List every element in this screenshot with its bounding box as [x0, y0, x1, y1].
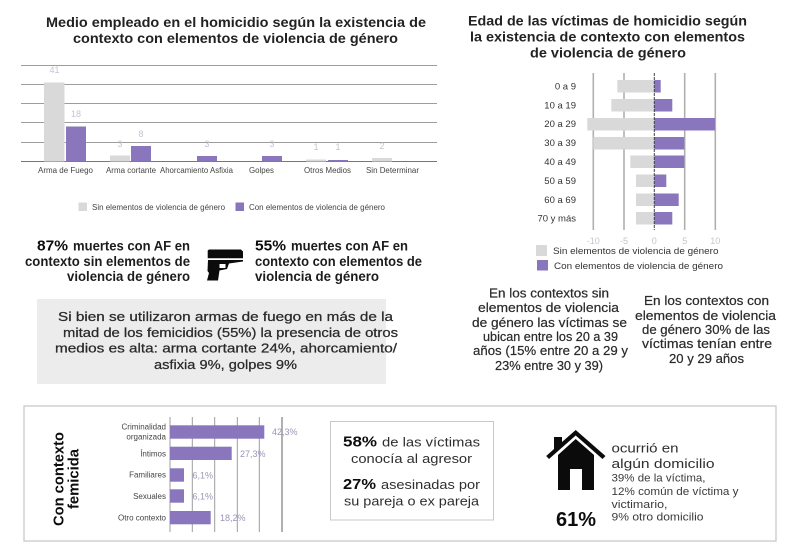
bar chart: contexto femicida: Criminalidad: [122, 422, 166, 432]
bar chart: edad de las víctimas: [537, 73, 720, 246]
text: contextos con elementos: víctimas tenían entre: [642, 337, 772, 351]
heading: con contexto femicida: Con contexto: [50, 432, 67, 526]
bar chart: edad de las víctimas: 10 a 19: [544, 100, 576, 112]
bar chart: contexto femicida: 18,2%: [220, 513, 246, 523]
bar chart: medio empleado: 18: [71, 109, 81, 119]
callout: armas de fuego: asfixia 9%, golpes 9%: [154, 357, 297, 372]
bar chart: edad de las víctimas: 70 y más: [537, 214, 576, 224]
callout: conocía al agresor: 27%: [343, 476, 376, 493]
bar chart: contexto femicida: Familiares: [129, 470, 166, 480]
text: contextos sin elementos: años (15% entre 20 a 29 y: [473, 344, 629, 358]
bar chart: contexto femicida: Sexuales: [133, 492, 166, 501]
title: medio empleado: [46, 14, 426, 46]
stat: 55%: contexto con elementos de: [255, 254, 422, 269]
text: contextos con elementos: En los contextos con: [644, 294, 769, 308]
callout: armas de fuego: medios es alta: arma cortante 24%, ahorcamiento/: [55, 340, 397, 356]
bar chart: edad de las víctimas: 50 a 59: [544, 176, 576, 187]
stat: 61% en domicilio: 9% otro domicilio: [612, 512, 704, 524]
stat: 61% en domicilio: ocurrió en: [612, 441, 678, 456]
stat: 61% en domicilio: victimario,: [612, 499, 668, 511]
legend: medio empleado: Sin elementos de violencia de género: [92, 203, 226, 212]
bar chart: medio empleado: Otros Medios: [304, 166, 351, 175]
stat: 55%: [255, 238, 422, 284]
title: medio empleado: Medio empleado en el homicidio según la existencia de: [46, 14, 426, 30]
bar chart: contexto femicida: 6,1%: [192, 492, 213, 502]
bar chart: medio empleado: 3: [269, 139, 275, 149]
title: edad de las víctimas: Edad de las víctimas de homicidio según: [468, 13, 747, 29]
bar chart: contexto femicida: organizada: [126, 432, 167, 442]
stat: 55%: 55%: [255, 238, 286, 255]
callout: armas de fuego: Si bien se utilizaron armas de fuego en más de la: [58, 309, 394, 324]
bar chart: medio empleado: 3: [117, 139, 123, 149]
bar chart: medio empleado: Golpes: [249, 166, 274, 175]
icon: house: [546, 430, 606, 490]
callout: conocía al agresor: conocía al agresor: [351, 451, 473, 466]
bar chart: edad de las víctimas: 20 a 29: [544, 119, 576, 130]
legend: medio empleado: Con elementos de violencia de género: [249, 203, 386, 212]
callout: conocía al agresor: 58%: [343, 434, 377, 451]
bar chart: medio empleado: 41: [49, 65, 60, 75]
bar chart: medio empleado: Arma de Fuego: [38, 166, 94, 175]
bar chart: contexto femicida: Íntimos: [140, 450, 166, 458]
bar chart: edad de las víctimas: 5: [682, 236, 687, 246]
bar chart: edad de las víctimas: -10: [587, 236, 600, 246]
stat: 87%: muertes con AF en: [73, 239, 190, 254]
text: contextos sin elementos: En los contextos sin: [489, 286, 609, 300]
stat: 87%: contexto sin elementos de: [25, 254, 190, 269]
callout: conocía al agresor: asesinadas por: [381, 477, 481, 492]
bar chart: medio empleado: 1: [313, 142, 319, 152]
text: contextos con elementos: de género 30% de las: [642, 323, 770, 337]
bar chart: edad de las víctimas: 60 a 69: [544, 195, 576, 206]
text: contextos con elementos: elementos de violencia: [635, 309, 776, 323]
callout: armas de fuego: mitad de los femicidios (55%) la presencia de otros: [63, 325, 399, 340]
bar chart: contexto femicida: 27,3%: [240, 449, 266, 459]
bar chart: edad de las víctimas: 0: [652, 236, 657, 246]
text: contextos con elementos: 20 y 29 años: [669, 352, 744, 366]
title: edad de las víctimas: de violencia de género: [530, 45, 686, 61]
bar chart: edad de las víctimas: 30 a 39: [544, 138, 576, 149]
bar chart: medio empleado: 1: [335, 142, 341, 152]
heading: con contexto femicida: [50, 432, 82, 526]
text: contextos sin elementos: ubican entre los 20 a 39: [483, 330, 618, 344]
stat: 61% en domicilio: 61%: [556, 509, 596, 531]
bar chart: medio empleado: Ahorcamiento Asfixia: [160, 166, 234, 175]
stat: 61% en domicilio: algún domicilio: [612, 456, 714, 471]
bar chart: edad de las víctimas: 0 a 9: [555, 82, 576, 92]
stat: 61% en domicilio: 12% común de víctima y: [612, 486, 739, 498]
heading: con contexto femicida: femicida: [65, 448, 82, 509]
bar chart: medio empleado: 3: [204, 139, 210, 149]
stat: 55%: muertes con AF en: [291, 239, 408, 254]
bar chart: medio empleado: 2: [379, 141, 385, 151]
title: edad de las víctimas: [468, 13, 747, 61]
panel: con contexto femicida: [24, 406, 776, 541]
callout: conocía al agresor: de las víctimas: [382, 435, 481, 450]
title: edad de las víctimas: la existencia de contexto con elementos: [470, 29, 745, 45]
text: contextos sin elementos: [472, 286, 629, 373]
callout: conocía al agresor: su pareja o ex pareja: [344, 494, 480, 509]
bar chart: medio empleado: Arma cortante: [106, 166, 157, 175]
text: contextos sin elementos: 23% entre 30 y 39): [495, 359, 603, 373]
legend: edad de las víctimas: Con elementos de violencia de género: [554, 261, 723, 272]
text: contextos sin elementos: elementos de violencia: [478, 301, 619, 315]
bar chart: contexto femicida: 6,1%: [192, 470, 213, 480]
stat: 55%: violencia de género: [255, 269, 379, 284]
bar chart: edad de las víctimas: -5: [620, 236, 628, 246]
text: contextos sin elementos: de género las víctimas se: [472, 316, 627, 330]
stat: 87%: 87%: [37, 238, 68, 255]
bar chart: contexto femicida: [118, 417, 298, 532]
bar chart: medio empleado: 8: [138, 129, 144, 139]
legend: edad de las víctimas: Sin elementos de violencia de género: [553, 246, 718, 257]
stat: 61% en domicilio: 39% de la víctima,: [612, 473, 706, 485]
bar chart: contexto femicida: Otro contexto: [118, 514, 167, 522]
bar chart: medio empleado: [21, 65, 437, 175]
title: medio empleado: contexto con elementos de violencia de género: [73, 30, 398, 46]
icon: pistol: [207, 250, 243, 280]
text: contextos con elementos: [635, 294, 776, 366]
legend: medio empleado: [78, 202, 386, 212]
bar chart: edad de las víctimas: 40 a 49: [544, 157, 576, 168]
stat: 61% en domicilio: [556, 441, 739, 531]
bar chart: contexto femicida: 42,3%: [272, 427, 298, 437]
stat: 87%: [25, 238, 190, 284]
bar chart: edad de las víctimas: 10: [710, 236, 720, 246]
legend: edad de las víctimas: [536, 245, 723, 272]
callout: conocía al agresor: [330, 422, 494, 520]
callout: armas de fuego: [37, 299, 399, 384]
bar chart: medio empleado: Sin Determinar: [366, 166, 419, 175]
stat: 87%: violencia de género: [67, 269, 190, 284]
